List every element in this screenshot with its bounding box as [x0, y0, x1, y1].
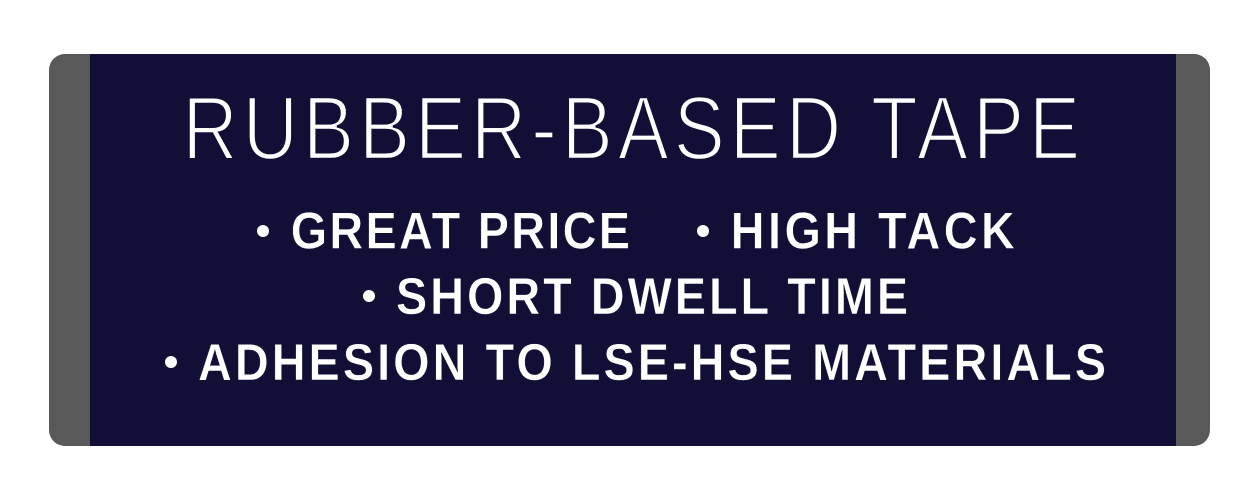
bullet: short dwell time: SHORT DWELL TIME — [396, 268, 908, 326]
title: RUBBER-BASED TAPE — [182, 77, 1080, 178]
tape grey backing — [49, 54, 1210, 446]
bullet: adhesion to LSE-HSE materials: ADHESION TO LSE-HSE MATERIALS — [198, 334, 1106, 392]
bullet: great price: GREAT PRICE — [291, 202, 630, 260]
bullet: high tack: HIGH TACK — [731, 202, 1015, 260]
tape navy label panel — [90, 54, 1176, 446]
